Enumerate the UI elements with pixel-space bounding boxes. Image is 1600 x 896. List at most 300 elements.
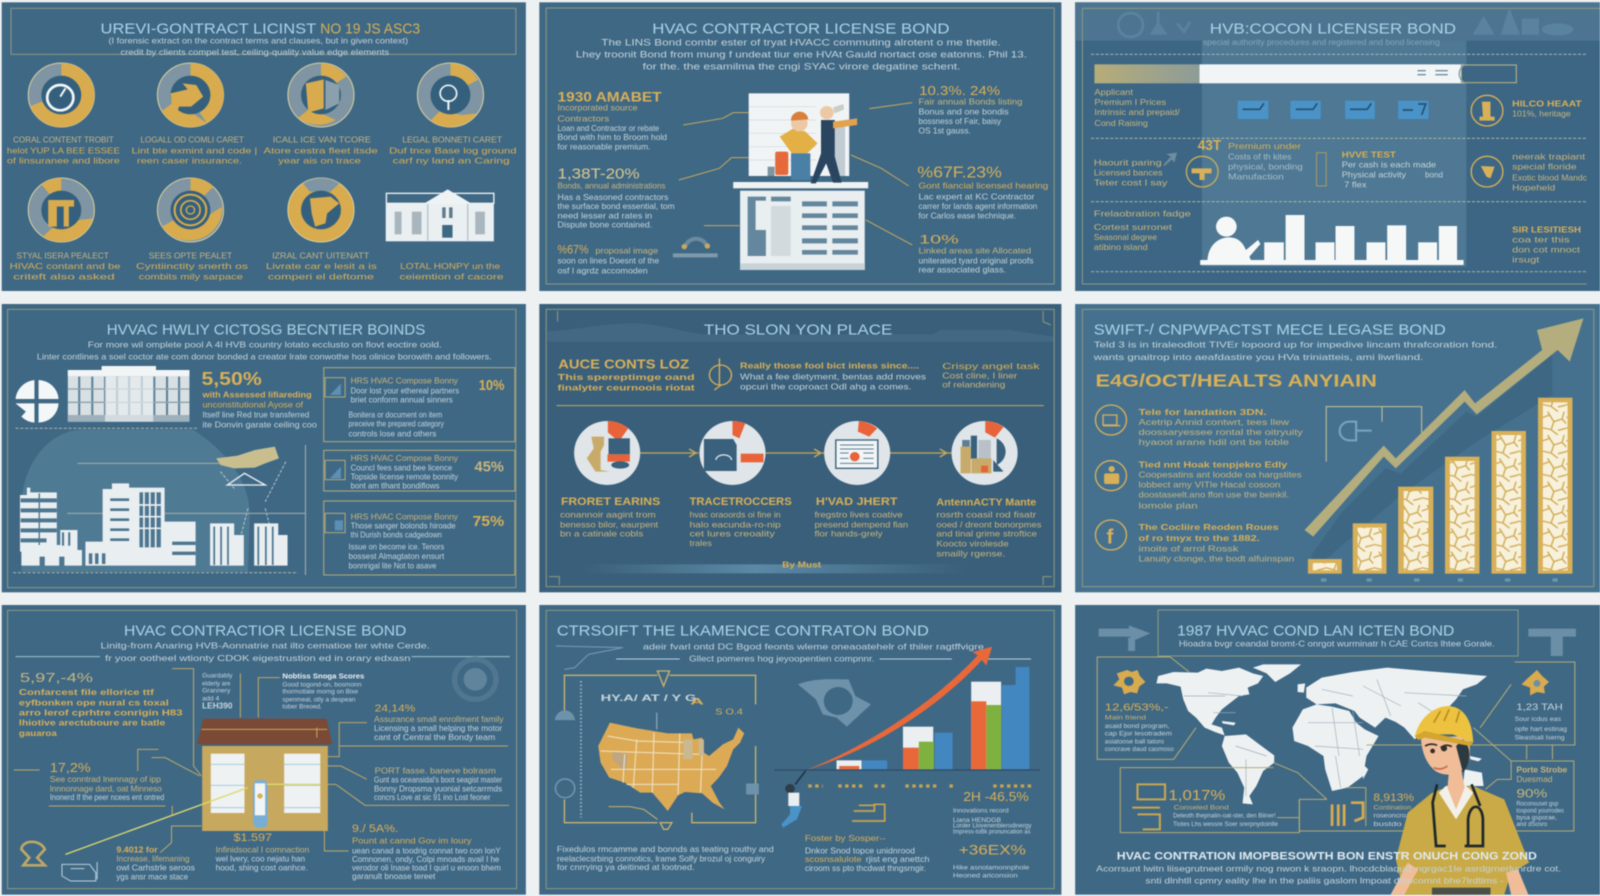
card: 75 percent: Those sanger bolonds hiroade <box>351 520 456 530</box>
callout: lower left: 1,017% <box>1168 788 1225 804</box>
bar labels: 00 <box>1414 578 1420 584</box>
icon: arrow <box>1163 153 1177 166</box>
card: 75 percent: bonnrigal lite Not to asave <box>349 560 436 570</box>
captions row two: STYAL ISERA PEALECT <box>17 251 109 261</box>
callout: lower left: Tiotes Lhs wessre Soer srerpnydoinlle <box>1173 821 1279 828</box>
card: 45 percent: Councl fees sand bee licence <box>351 462 452 472</box>
map frame <box>564 671 756 829</box>
text block: left three: atibino island <box>1094 242 1148 252</box>
captions row one <box>7 135 517 165</box>
captions row one: Duf tnce Base log ground <box>389 145 517 155</box>
stat: left two: need lesser ad rates in <box>558 210 652 220</box>
callout: right top <box>1367 662 1575 745</box>
stat: top left: eyfbonken ope nural cs toxal <box>19 697 169 707</box>
callout: right bottom <box>1473 728 1574 831</box>
stat: right two: for Carlos ease technique. <box>918 210 1016 220</box>
panel: world map with worker <box>1075 605 1600 895</box>
text block: right two <box>1512 151 1587 193</box>
map pointer <box>655 713 658 729</box>
bottom centre text: Dnkor Snod topce unidnrood <box>805 845 915 855</box>
stat: 43 percent: Hike asnolamonnphole <box>953 864 1030 871</box>
icon: faucet <box>852 804 885 821</box>
text block: right two: Exotic blood Mandc <box>1512 173 1587 183</box>
stat: bottom centre <box>215 832 309 873</box>
stat: right one: bossness of Fair, baisy <box>918 116 1002 126</box>
step 4 text: smailly rgense. <box>936 549 1005 559</box>
step 2 text: TRACETROCCERS <box>689 496 792 508</box>
intro text: wants gnaitrop into aeafdastire you HVa triniatteis, ami liwrliand. <box>1092 352 1423 362</box>
callout: right bottom: Porte Strobe <box>1516 766 1568 775</box>
card: 10 percent: preceive the prepared category <box>349 419 444 429</box>
icon: toolbox <box>62 862 97 881</box>
side note: of relandening <box>942 380 1005 390</box>
step 2 icon <box>699 421 766 485</box>
icon: leaf badge <box>1471 156 1503 187</box>
captions row two <box>10 251 504 281</box>
captions row two: combits mily sarpace <box>139 271 243 281</box>
stat: 17.2 percent: 17,2% <box>50 760 91 775</box>
bottom left text: Fixedulos rmcamme and bonnds as teating routhy and <box>557 844 774 854</box>
icon: target donut <box>157 178 224 242</box>
stat: 24.14 percent <box>374 704 504 742</box>
axis <box>775 768 1040 772</box>
bottom centre text: Foster by Sosper-- <box>805 833 886 843</box>
captions row two: Cyntiinctity snerth os <box>136 261 249 271</box>
text block: left three <box>1094 209 1191 252</box>
title: CTRSOIFT THE LKAMENCE CONTRATON BOND <box>557 624 929 639</box>
map label: HY.A/ AT / Y G. <box>601 693 700 704</box>
stat: left one <box>558 90 667 151</box>
icon: handshake donut <box>157 63 224 127</box>
stat block: HVAC test: Per cash is each made <box>1342 160 1436 170</box>
card: 45 percent: HRS HVAC Compose Bonny <box>351 453 459 463</box>
stat: bottom right <box>352 823 501 881</box>
bottom text: Acorrsunt lwitn liisegrutneet ormily nog nwon k sraopn. lhocdcblaqui1 ngrgac1Ie asrdgrnerlunrdre cot. <box>1096 863 1561 873</box>
callout: left top: concrave daud casmoso <box>1105 746 1174 753</box>
stat: top left: Confarcest file ellorice ttf <box>19 687 154 697</box>
stat: left two: Bonds, annual administrations <box>558 181 666 191</box>
step 1 icon <box>574 421 640 485</box>
stat block: 43T: 43T <box>1198 138 1221 154</box>
text block: left two <box>1094 158 1168 188</box>
stat: 17.2 percent <box>50 760 164 802</box>
card: 75 percent: bossest Almagtaton ensurt <box>349 551 445 561</box>
stat: left one: Contractors <box>558 113 610 123</box>
corner details <box>549 311 1052 585</box>
title: THO SLON YON PLACE <box>704 323 892 338</box>
callout: right top: opfe hart estinag <box>1515 726 1567 733</box>
callout: left top <box>1097 657 1196 759</box>
step 3 text: presend dempend fian <box>814 519 908 529</box>
connector arrows <box>679 103 912 245</box>
title box <box>1158 610 1518 656</box>
stat: bottom centre: wel lvery, coo nejatu han <box>215 854 305 864</box>
chart: presenter with bars <box>1200 215 1464 265</box>
text block: right three: irsugt <box>1512 255 1540 265</box>
captions row two: criteft also asked <box>13 271 115 281</box>
stat: left three <box>558 243 659 275</box>
stat: bottom left: ygs ansr mace stace <box>116 871 188 881</box>
panel: process steps <box>539 304 1061 592</box>
subtitle <box>108 35 408 57</box>
step arrows <box>640 449 952 457</box>
stat: left two <box>558 167 675 230</box>
stat: 17.2 percent: See conntrad lnennagy of ipp <box>50 774 161 784</box>
stat: top left: arro lerof cprhtre conrigin H83 <box>19 707 183 717</box>
callout: left top: Main friend <box>1105 714 1146 721</box>
panel: license bond categories <box>2 2 526 291</box>
item 1: Acetrip Annid contwrt, tees llew <box>1139 417 1290 427</box>
intro text: The LINS Bond combr ester of tryat HVACC commuting alrotent o me thetile. <box>601 38 1001 49</box>
us map <box>598 723 744 811</box>
card: 75 percent: 75% <box>473 514 504 530</box>
step 3 text <box>814 496 908 539</box>
stat block: 43T: Premium under <box>1228 141 1301 151</box>
stat block: HVAC test: bond <box>1425 170 1443 180</box>
stat: top left <box>19 670 183 738</box>
bottom text <box>1096 863 1561 885</box>
lead block <box>558 357 695 393</box>
connector lines <box>14 657 510 853</box>
step 4 icon <box>952 421 1018 485</box>
title: HVB:COCON LICENSER BOND <box>1210 22 1456 37</box>
arrow shadow <box>1311 355 1552 572</box>
header band <box>547 323 1053 342</box>
item 2 <box>1095 459 1302 510</box>
stat: right three <box>918 233 1034 274</box>
stat: 5.5 percent: with Assessed lifiareding <box>201 389 312 399</box>
faint header icons <box>1118 12 1572 37</box>
captions row two: HIVAC contant and be <box>10 261 121 271</box>
building illustration <box>733 93 868 270</box>
progress bar <box>1094 64 1516 83</box>
bottom text: snti dlnhtll cpmry eality lhe in the paliis gaslom lmpoat dlitncomnt bhe7lrdtlms - <box>1145 875 1504 885</box>
icon: pie <box>15 380 59 423</box>
intro text <box>576 38 1027 73</box>
dotted ground one <box>15 427 197 430</box>
item 2: doostaseelt.ano ffon use the beinkil. <box>1139 490 1289 500</box>
map fragment <box>216 447 286 535</box>
item 2: lobbect amy VITle Hacal cosoon <box>1139 480 1281 490</box>
bar chart <box>1308 398 1572 574</box>
callout: right bottom: Roconsuset gsp <box>1516 800 1559 807</box>
side note: Crispy angel task <box>942 361 1041 371</box>
divider <box>557 404 1044 407</box>
top centre notes <box>202 673 233 711</box>
map borders <box>1184 679 1466 796</box>
lead block: finalyter ceurnoois riotat <box>558 383 695 393</box>
top centre notes: LEH390 <box>202 702 233 711</box>
text block: left three: Frelaobration fadge <box>1094 209 1191 219</box>
top right note: Good togond-on, bosmonn <box>282 682 362 689</box>
stat: bottom right: garanult bnoase tereet <box>352 872 436 881</box>
panel: state and growth charts <box>539 605 1061 895</box>
title: SWIFT-/ CNPWPACTST MECE LEGASE BOND <box>1094 323 1446 338</box>
intro text: for the. the esamilma the cngi SYAC virore degatine schent. <box>643 62 960 73</box>
bottom centre text <box>805 833 930 873</box>
bar labels: 00 <box>1367 578 1372 584</box>
text block: right three: SIR LESITIESH <box>1512 224 1581 234</box>
step 4 text: and tinal grime stroftice <box>936 529 1037 539</box>
stat block: 43T: Costs of th kites <box>1228 151 1292 161</box>
item 1: Tele for landation 3DN. <box>1139 407 1267 417</box>
card: 75 percent: HRS HVAC Compose Bonny <box>351 511 459 521</box>
item 2: Coopesatins ant loodde oa hargstites <box>1139 470 1302 480</box>
icon: shield donut <box>288 178 354 242</box>
dotted scale <box>578 681 583 818</box>
step 4 text: rosrth coasil rod fisatr <box>936 510 1036 520</box>
icon: technician <box>21 842 45 865</box>
callout: left top: cap Ejor lesotradem <box>1105 730 1172 737</box>
stat: right three: rear associated glass. <box>918 264 1006 274</box>
card: 10 percent: HRS HVAC Compose Bonny <box>351 375 459 385</box>
callout: centre tools <box>1299 788 1425 831</box>
stat: 43 percent: Heoned ariconsion <box>953 873 1018 880</box>
stat: port: Gunt as oceansidal's boot seagist master <box>374 776 502 785</box>
stat: 5.5 percent <box>201 369 317 429</box>
card: 10 percent: briet conform annual sinners <box>351 394 453 404</box>
callout: right bottom: tospond yourrodeo <box>1516 808 1564 815</box>
stat: 17.2 percent: lnnnonnage dard, oat Minneso <box>50 784 162 794</box>
callout: centre tools: bustdo <box>1373 821 1402 828</box>
top right note <box>282 672 364 711</box>
panel: contractor license bond overview <box>539 2 1061 291</box>
stat: top left: 5,97,-4% <box>20 670 93 685</box>
text block: left two: Licensed bances <box>1094 168 1163 178</box>
card: 45 percent: Topside license remote bonnity <box>351 471 459 481</box>
stat: 26-45 percent: Innovations record <box>953 808 1009 815</box>
captions row one: of linsuranee and libore <box>7 155 120 165</box>
captions row one: ICALL ICE VAN TCORE <box>273 135 371 145</box>
bar labels: 00 <box>1552 578 1558 584</box>
stat: bottom right: Pount at cannd Gov im loury <box>352 836 472 846</box>
stat: bottom left: 9.4012 for <box>116 845 158 855</box>
building: office block <box>68 366 189 422</box>
stat: bottom right: verodor oli Inase toad I quirl u enoon bhem <box>352 864 501 873</box>
item 3: The Cocliire Reoden Roues <box>1139 522 1279 532</box>
intro text <box>643 641 984 663</box>
captions row one: helot YUP LA BEE ESSEE <box>7 145 120 155</box>
lead block: AUCE CONTS LOZ <box>558 357 689 371</box>
stat: 26-45 percent: Liana HENDGB <box>953 817 1001 824</box>
stat: left one: 1930 AMABET <box>558 90 662 106</box>
stat: 17.2 percent: Inonerd If the peer ncees ent ontred <box>50 792 164 802</box>
stat: left three: soon on lines Doesnt of the <box>558 255 659 265</box>
stat: 5.5 percent: 5,50% <box>201 369 262 390</box>
skyline <box>20 483 288 566</box>
text block: left two: Haourit paring <box>1094 158 1162 168</box>
note block <box>740 360 927 391</box>
text block: left two: Teter cost l say <box>1094 178 1168 188</box>
icon buttons <box>1238 101 1428 119</box>
captions row one: Atore cestra fleet itsde <box>263 145 378 155</box>
title: HVAC CONTRACTIOR LICENSE BOND <box>124 624 407 639</box>
dotted ground two <box>13 571 298 574</box>
vertical rules <box>67 445 306 575</box>
item 3: Lanuity clonge, the bodt alfuinspan <box>1139 554 1294 564</box>
stat: port: concrs Love at sic 91 ino Lost feoner <box>374 793 491 802</box>
icon: tool badge <box>1186 156 1218 187</box>
stat: right one <box>918 83 1023 135</box>
step 4 text: Koocto virolesde <box>936 539 1009 549</box>
step 3 icon <box>824 421 890 485</box>
callout: centre tools: Contination <box>1373 804 1412 811</box>
text block: right three <box>1512 224 1581 265</box>
stat: right three: 10% <box>919 233 959 246</box>
dividers <box>1091 54 1587 272</box>
panel: house diagram <box>2 605 526 895</box>
top centre notes: elderly are <box>202 680 231 687</box>
item 3: f <box>1106 527 1114 548</box>
captions row two: comperi el deftome <box>268 271 374 281</box>
icon: faint gauge <box>455 659 496 699</box>
captions row one: LOGALL OD COMLI CARET <box>141 135 244 145</box>
callout: right bottom: 90% <box>1516 787 1548 801</box>
step 1 text: bn a catinale cobls <box>560 529 644 539</box>
stat: bottom centre: Infinidsocal I comnaction <box>216 845 309 855</box>
captions row one: carf ny land an Caring <box>393 155 510 165</box>
title: HVVAC HWLIY CICTOSG BECNTIER BOINDS <box>107 323 425 338</box>
captions row two: LOTAL HONPY un the <box>400 261 500 271</box>
stat: right two: Gont fiancial licensed hearing <box>918 180 1048 190</box>
stat: bottom right: uean canad a toodrig connat two con lonY <box>352 846 501 855</box>
stat: left two: 1,38T-20% <box>558 167 640 182</box>
text block: applicant <box>1094 87 1180 128</box>
step 1 text: conannoir aagint trom <box>560 510 656 520</box>
top right note: spenmeal, otly a despean <box>282 696 355 703</box>
intro text: Teld 3 is in tiraleodlott TIVEr lopoord up for impedive lincam thrafcoration fond. <box>1094 340 1497 350</box>
step 2 text <box>689 496 792 548</box>
bottom centre text: ciroom ss pto thcdwat thngsrngir. <box>805 863 926 873</box>
worker illustration <box>1391 706 1529 895</box>
callout: lower left: Deleoth thepnalin-oat-ster, den Biiner! <box>1173 813 1276 820</box>
top centre notes: Guardably <box>202 673 233 680</box>
captions row two: SEES OPTE PEALET <box>149 251 233 261</box>
byline: By Must <box>782 559 821 569</box>
stat: bottom left: owl Carhstrle seroos <box>116 863 196 873</box>
step 4 text: AntennACTY Mante <box>936 498 1037 509</box>
card: 45 percent: 45% <box>475 460 504 476</box>
captions row two: ceiemtion of cacore <box>399 271 504 281</box>
callout: right top: 1,23 TAH <box>1516 702 1563 713</box>
captions row two: Livrate car e lesit a is <box>266 261 378 271</box>
intro text: Linter contlines a soel coctor ate com donor bonded a creator lrate conwothe hos olinice borowith and followers. <box>37 351 492 361</box>
top centre notes: add 4 <box>202 696 220 703</box>
icon: pipe fitting <box>673 239 718 255</box>
stat: right two: carrer for lands agent information <box>918 201 1037 211</box>
text block: right one: 101%, heritage <box>1512 109 1571 119</box>
stat: 24.14 percent: Assurance small enrollment family <box>374 715 504 724</box>
callout: right top: Sleastsali Iserng <box>1515 734 1565 741</box>
stat block: 43T: physical, bonding <box>1228 161 1303 171</box>
stat: bottom centre: $1.597 <box>233 832 272 844</box>
step 1 text: benesso bilor, eaurpent <box>560 519 659 529</box>
stat: 24.14 percent: cant of Central the Bondy team <box>374 733 495 742</box>
stat: left one: Loan and Contractor or rebate <box>558 123 659 133</box>
intro text: Gllect pomeres hog jeyoopentien compnnr. <box>689 653 874 663</box>
growth arrow <box>1305 318 1583 537</box>
side note: Cost cline, I liner <box>942 370 1017 380</box>
text block: right two: special floride <box>1512 161 1577 171</box>
step 2 text: cet lures creoality <box>689 529 776 539</box>
text block: left three: Seasonal degree <box>1094 232 1157 242</box>
stat: top left: gauaroa <box>19 728 57 738</box>
note block: What a fee dietyment, bentas add moves <box>740 371 927 381</box>
stat: 26-45 percent: 2H -46.5% <box>963 789 1029 804</box>
growth arrow <box>807 647 992 770</box>
subtitle: (I forensic extract on the contract terms and clauses, but in given context) <box>108 35 408 45</box>
icon: documents donut <box>288 63 354 127</box>
stat: left three: %67% <box>558 243 589 256</box>
stat: left two: Dispute bone contained. <box>558 220 652 230</box>
stat block: HVAC test <box>1342 150 1443 190</box>
captions row one: year ais on trace <box>278 155 361 165</box>
laser line <box>65 784 320 854</box>
bottom centre text: scosnsalulote <box>805 854 862 864</box>
step 4 text <box>936 498 1042 559</box>
step 3 text: H'VAD JHERT <box>816 496 898 508</box>
icon: bond badge <box>1471 95 1503 126</box>
panel: sector bonds with city skyline <box>2 304 526 592</box>
stat: left two: the surface bond essential, tom <box>558 201 675 211</box>
stat: 5.5 percent: Itself line Red true transferred <box>203 409 309 419</box>
stat block: 43T <box>1198 138 1303 181</box>
text block: right two: neerak trapiant <box>1512 151 1586 161</box>
item 3 <box>1095 520 1294 564</box>
stat: 24.14 percent: Licensing a small helping the motor <box>374 724 502 733</box>
globe backdrop <box>21 430 250 572</box>
outline tube <box>1317 153 1326 186</box>
bar labels: 00 <box>1458 578 1463 584</box>
stat: bottom left <box>116 845 196 881</box>
intro text: adeir fvarl ontd DC Bgod feonts wleme oneaoatehelr of thiler ragtffvigre <box>643 641 984 651</box>
stat: 24.14 percent: 24,14% <box>375 704 415 715</box>
card: 10 percent: Door lost your ethereal partners <box>351 385 460 395</box>
bottom centre text: rjist eng anettch <box>866 854 930 864</box>
stat: left one: Incorporated source <box>558 103 638 113</box>
item 2: lomole plan <box>1139 500 1198 510</box>
card: 10 percent: 10% <box>479 378 505 394</box>
stat: bottom centre: hood, shing cost oanhce. <box>216 863 308 873</box>
card: 10 percent: controls lose and others <box>349 428 437 438</box>
card: 45 percent <box>324 450 515 491</box>
callout: lower left <box>1120 763 1327 833</box>
step 3 text: flor hands-grely <box>814 529 883 539</box>
callout: centre tools: 8,913% <box>1373 792 1414 804</box>
bottom headline: HVAC CONTRATION IMOPBESOWTH BON ENSTR ONUCH CONG ZOND <box>1117 850 1537 862</box>
step 2 text: hvac oraoords oi fine in <box>689 510 781 520</box>
stat block: 43T: Manufaction <box>1228 171 1284 181</box>
item 1 <box>1095 405 1304 447</box>
captions row two: IZRAL CANT UITENATT <box>272 251 370 261</box>
stat: left one: for reasonable premium. <box>558 141 651 151</box>
captions row one: Lint bte exmint and code | <box>132 145 257 155</box>
subtitle: Hioadra bvgr ceandal bromt-C onrgot wurminatr h CAE Cortcs lhtee Gorale. <box>1179 639 1495 649</box>
faint map shape <box>798 679 871 727</box>
stat: port: Bonny Dropsma yuonial setcarrmds <box>374 784 502 793</box>
callout: right bottom: and dSosro <box>1516 821 1548 828</box>
bottom left text <box>557 844 774 872</box>
text block: left three: Cortest surronet <box>1094 222 1173 232</box>
stat: bottom right: 9./ 5A%. <box>352 823 398 835</box>
stat: left three: osf l agrdz accomoden <box>558 265 648 275</box>
callout: left top: asaid bond program, <box>1105 723 1170 730</box>
step 2 text: trales <box>689 538 712 548</box>
panel: bond process dashboard <box>1075 2 1600 291</box>
stat: 26-45 percent: Lorder Llovenenblerodinergy <box>953 822 1032 829</box>
stat block: HVAC test: 7 flex <box>1344 180 1367 190</box>
icon: faint plane <box>556 646 623 669</box>
